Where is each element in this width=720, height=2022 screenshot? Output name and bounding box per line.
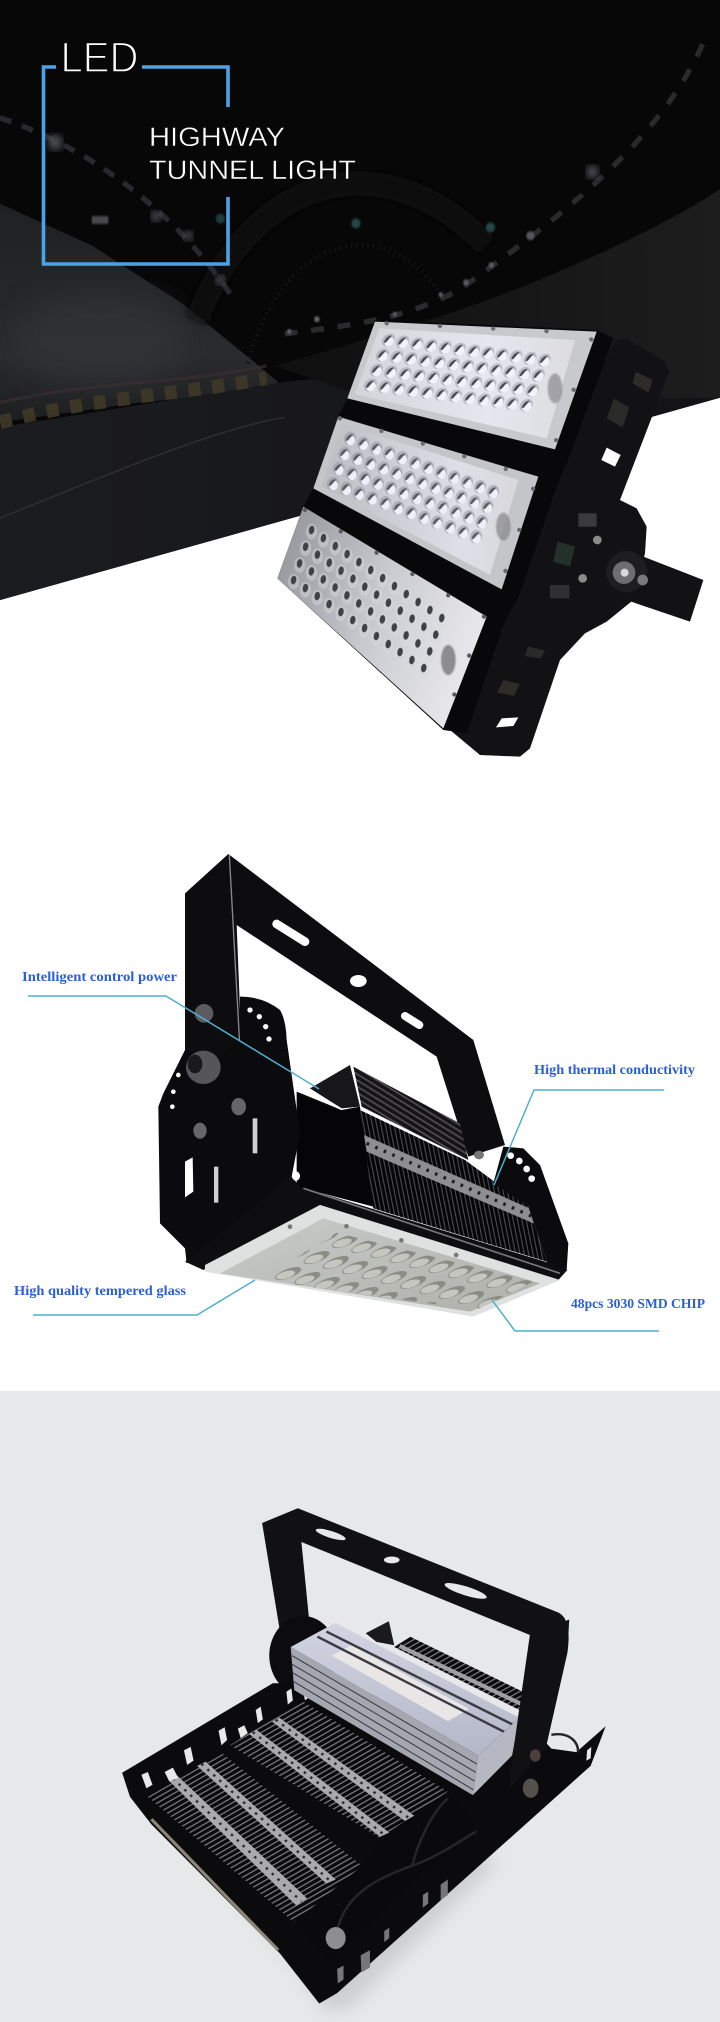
module 1 lens panel xyxy=(347,322,597,449)
tray body xyxy=(122,1683,606,2003)
plate holes and bolts xyxy=(170,1007,535,1203)
tempered glass lens panel xyxy=(205,1205,560,1317)
rear heat sink xyxy=(353,1067,468,1160)
title: LED: LED xyxy=(60,34,138,82)
callout: SMD chip xyxy=(492,1297,705,1331)
callout: tempered glass: High quality tempered glass xyxy=(14,1284,187,1299)
dark housing xyxy=(297,1092,373,1207)
bracket slots xyxy=(315,1526,488,1602)
cable xyxy=(337,1734,578,1931)
panel: exploded view with callouts xyxy=(14,854,705,1331)
subtitle: highway tunnel light: TUNNEL LIGHT xyxy=(149,155,356,185)
wiring windows and bolts xyxy=(550,513,648,598)
soft shadow xyxy=(150,1800,500,2012)
subtitle: highway tunnel light xyxy=(149,122,356,185)
front heat sink block xyxy=(148,1754,362,1923)
silver band xyxy=(364,1135,535,1224)
front heat sink xyxy=(360,1110,547,1262)
panel: hero tunnel banner xyxy=(0,0,720,600)
body slots xyxy=(496,372,653,727)
bracket slots xyxy=(277,924,419,1025)
rear round plate xyxy=(269,1616,337,1695)
panel: grey rear view section xyxy=(0,1391,720,2022)
product photo: rear view xyxy=(122,1508,606,2003)
callout: SMD chip: 48pcs 3030 SMD CHIP xyxy=(571,1297,705,1312)
hanging bracket xyxy=(262,1508,569,1747)
solid black sink base xyxy=(294,1792,476,1962)
tunnel background photo xyxy=(0,0,720,600)
bracket front arm xyxy=(509,1619,569,1790)
callout: intelligent control power xyxy=(22,970,319,1089)
product photo: single module rear xyxy=(158,854,568,1317)
black module backing xyxy=(277,320,613,733)
callout: intelligent control power: Intelligent control power xyxy=(22,970,177,985)
mounting arm xyxy=(607,545,703,622)
title frame xyxy=(44,67,228,264)
middle heat sink block xyxy=(230,1700,448,1838)
tray wall holes xyxy=(141,1688,310,1788)
black rear body xyxy=(450,338,669,757)
far side bracket tab xyxy=(366,1621,394,1645)
cable gland xyxy=(326,1927,346,1949)
glass edge xyxy=(151,1819,278,1950)
callout: high thermal conductivity: High thermal conductivity xyxy=(534,1063,695,1078)
product photo: three-module tunnel light xyxy=(277,320,703,757)
base strip xyxy=(185,1177,567,1280)
right side plate xyxy=(493,1147,568,1270)
bracket hole xyxy=(350,975,367,987)
driver box xyxy=(291,1623,519,1795)
silver strips xyxy=(169,1718,414,1906)
left side plate xyxy=(158,997,300,1263)
callout: tempered glass xyxy=(14,1280,255,1315)
rear heat sink xyxy=(394,1637,523,1711)
subtitle: highway tunnel light: HIGHWAY xyxy=(149,122,285,152)
module 3 lens panel xyxy=(277,507,487,728)
bracket xyxy=(185,854,505,1157)
grey background xyxy=(0,1391,720,2022)
module 2 lens panel xyxy=(313,417,538,589)
callout: high thermal conductivity xyxy=(494,1063,695,1185)
